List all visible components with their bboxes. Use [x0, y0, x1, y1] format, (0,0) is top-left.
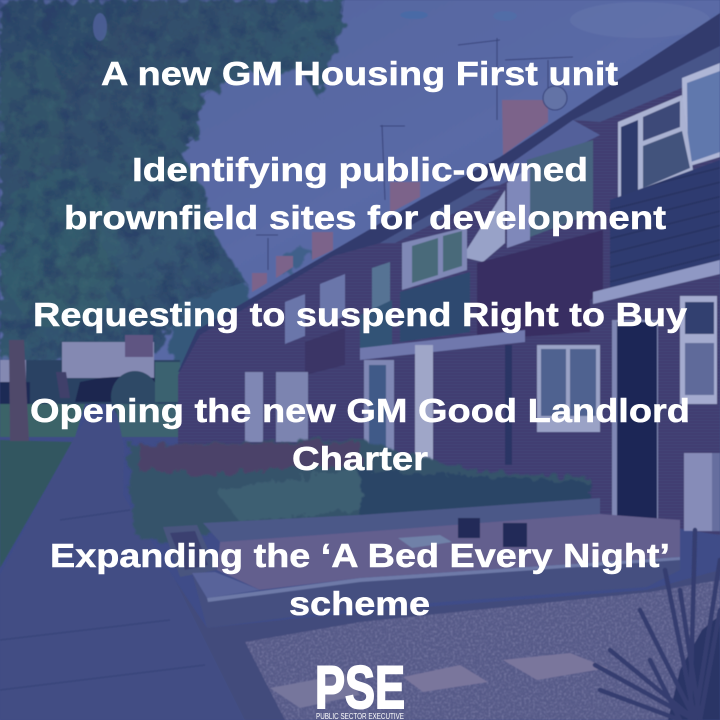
text list of policy actions: [30, 56, 690, 623]
house roof: [178, 13, 720, 372]
house wall: [178, 46, 720, 535]
raised planters and paving: [163, 498, 680, 628]
distant houses and cars: [0, 335, 180, 423]
footpath: [0, 420, 245, 720]
large tree canopy: [0, 0, 345, 360]
spiky garden plant: [595, 530, 720, 720]
item: good landlord charter: Opening the new GM Good Landlord: [30, 393, 690, 430]
utility box: [684, 453, 720, 531]
lower windows and door: [245, 296, 717, 538]
tree leaf texture: [0, 0, 350, 360]
item: good landlord charter: [30, 393, 690, 478]
antennas and dish: [256, 38, 573, 270]
tree trunk: [9, 340, 70, 441]
item: a bed every night: [50, 538, 670, 623]
item: a bed every night: scheme: [289, 586, 430, 623]
sky: [0, 0, 720, 380]
background tree behind houses: [170, 245, 312, 372]
sky gap through branches: [93, 13, 107, 41]
item: good landlord charter: Charter: [292, 441, 428, 478]
clapboard and lattice panels: [305, 160, 720, 375]
item: a bed every night: Expanding the ‘A Bed Every Night’: [50, 538, 670, 575]
PSE logo: PSE: [315, 654, 405, 720]
item: right to buy: Requesting to suspend Right to Buy: [33, 297, 687, 334]
upper windows: [285, 63, 720, 344]
item: housing first unit: A new GM Housing First unit: [101, 56, 618, 93]
gravel and stepping stones: [175, 570, 720, 720]
item: brownfield sites: [64, 152, 666, 237]
item: brownfield sites: brownfield sites for development: [64, 200, 666, 237]
flower bed and shrubs: [128, 440, 590, 545]
lawns: [0, 404, 180, 568]
chimneys: [252, 100, 548, 292]
item: brownfield sites: Identifying public-owned: [132, 152, 588, 189]
